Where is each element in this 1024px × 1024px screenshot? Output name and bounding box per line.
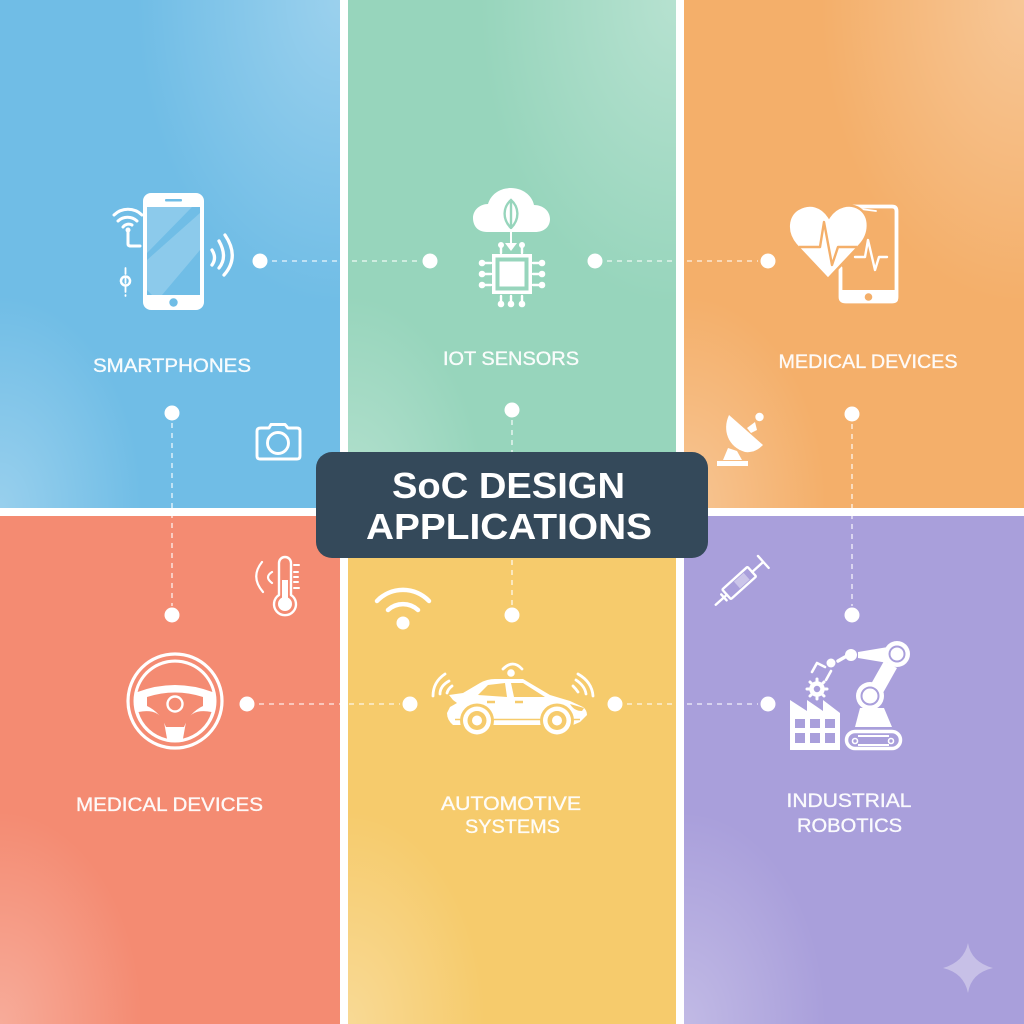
icon: thermometer with signal — [256, 557, 299, 615]
title box — [316, 452, 708, 558]
connector lines and dots — [164, 254, 860, 712]
icon: steering wheel — [128, 654, 222, 748]
label: automotive systems: AUTOMOTIVE — [441, 794, 581, 815]
icon: smartphone with wireless signals — [114, 193, 232, 310]
panel: IoT sensors background — [348, 0, 676, 508]
icon: factory and robot arm — [790, 641, 910, 750]
panel: automotive systems background — [348, 516, 676, 1024]
label: medical devices (bottom): MEDICAL DEVICES — [76, 795, 263, 816]
icon: connected car — [433, 664, 593, 738]
label: automotive systems — [441, 794, 581, 838]
panel: steering wheel background — [0, 516, 340, 1024]
icon: satellite dish — [717, 413, 764, 466]
panel: medical devices background — [684, 0, 1024, 508]
panel: smartphones background — [0, 0, 340, 508]
label: industrial robotics — [786, 791, 912, 837]
title line 2: APPLICATIONS — [366, 506, 652, 547]
label: medical devices (top): MEDICAL DEVICES — [778, 352, 958, 373]
label: automotive systems: SYSTEMS — [465, 817, 560, 838]
icon: IoT cloud, leaf and chip — [473, 188, 550, 307]
icon: sparkle — [943, 943, 993, 993]
icon: camera — [257, 424, 300, 459]
icon: syringe — [710, 556, 769, 611]
icon: heart with heartbeat and medical phone — [789, 206, 898, 303]
title line 1: SoC DESIGN — [392, 465, 625, 506]
icon: wifi — [377, 590, 429, 630]
label: industrial robotics: INDUSTRIAL — [786, 791, 912, 812]
panel: industrial robotics background — [684, 516, 1024, 1024]
label: smartphones: SMARTPHONES — [93, 356, 251, 377]
label: IoT sensors: IOT SENSORS — [443, 349, 579, 370]
label: industrial robotics: ROBOTICS — [797, 816, 902, 837]
